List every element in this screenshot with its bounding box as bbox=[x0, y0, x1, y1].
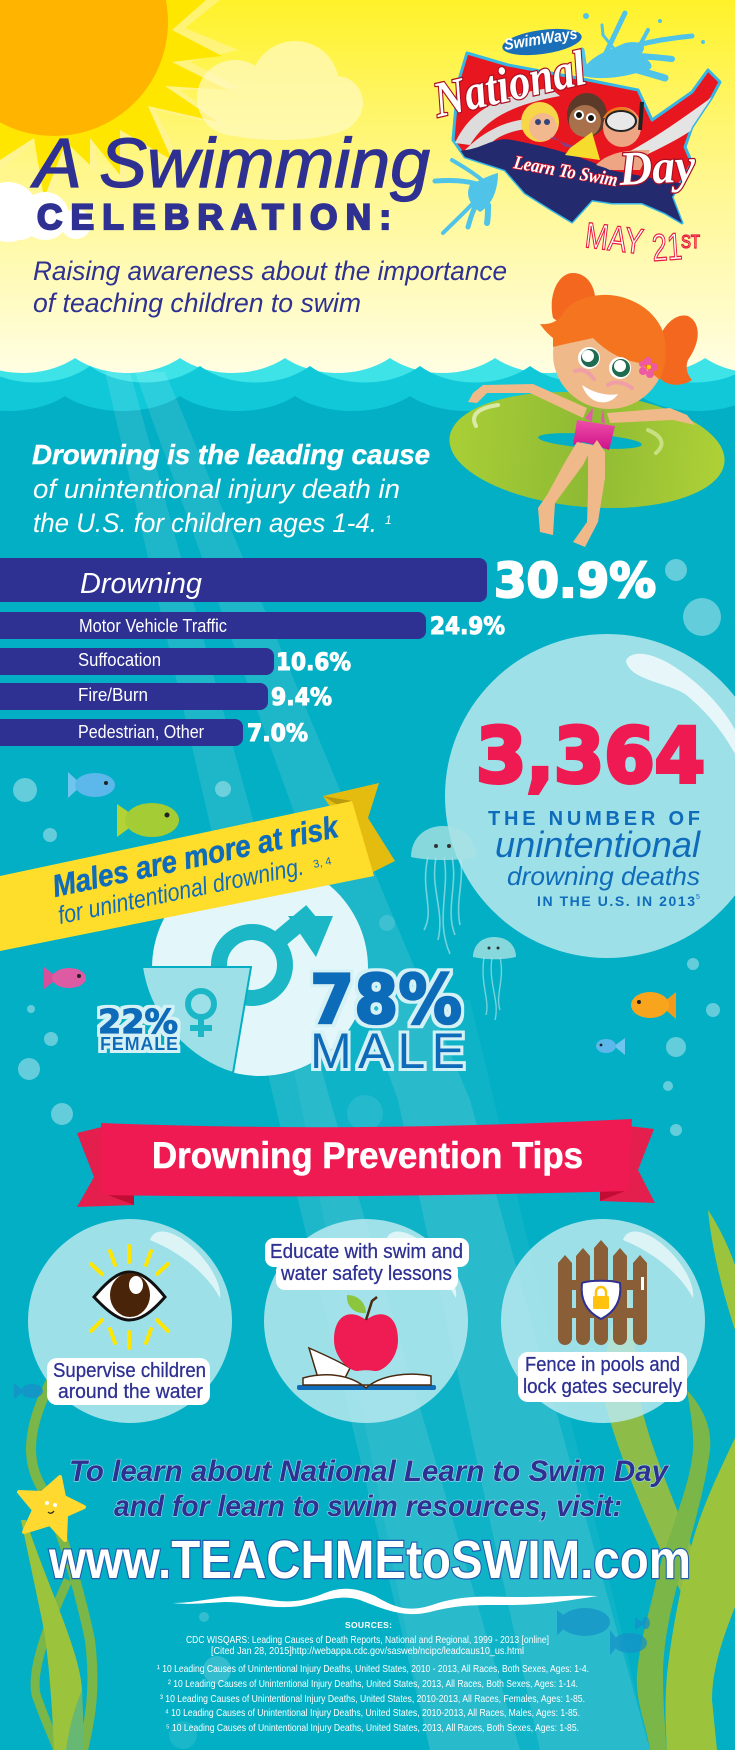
label: Educate with swim and bbox=[270, 1241, 463, 1263]
lead statement: the U.S. for children ages 1-4. bbox=[33, 508, 377, 538]
female slice bbox=[142, 967, 251, 1073]
swimsuit bbox=[573, 408, 615, 450]
label bbox=[47, 1358, 210, 1405]
lead statement: of unintentional injury death in bbox=[33, 474, 400, 504]
bar: Pedestrian, Other: Pedestrian, Other bbox=[78, 722, 204, 742]
subtitle: Raising awareness about the importance bbox=[33, 256, 507, 286]
bubble highlight bbox=[386, 1232, 456, 1298]
sources: [Cited Jan 28, 2015]http://webappa.cdc.gov/sasweb/ncipc/leadcaus10_us.html bbox=[211, 1645, 524, 1657]
jellyfish: small bbox=[473, 937, 516, 1020]
seaweed: right bbox=[602, 1210, 735, 1750]
hair bbox=[540, 295, 666, 380]
fish: orange bbox=[631, 992, 676, 1019]
bar: Fire/Burn: Fire/Burn bbox=[78, 685, 148, 705]
male percentage bbox=[310, 961, 465, 1079]
tip bubble: educate bbox=[264, 1219, 469, 1423]
seaweed: left bbox=[21, 1377, 92, 1750]
female percentage: 22% bbox=[98, 1002, 178, 1041]
bar: Suffocation bbox=[0, 648, 351, 676]
sources: SOURCES: bbox=[345, 1620, 392, 1630]
bubble highlight bbox=[626, 654, 735, 754]
male pie bbox=[152, 860, 368, 1076]
bar: Suffocation: 10.6% bbox=[276, 648, 351, 676]
stat bubble: 3,364 bbox=[445, 634, 735, 958]
fish: pink bbox=[44, 967, 86, 989]
male percentage: 78% bbox=[310, 961, 462, 1040]
bar: Motor Vehicle Traffic bbox=[0, 612, 505, 640]
label bbox=[265, 1238, 469, 1290]
caption: IN THE U.S. IN 2013 bbox=[537, 893, 695, 909]
swim ring bbox=[445, 381, 729, 519]
bar: Motor Vehicle Traffic: 24.9% bbox=[430, 612, 505, 640]
eyes bbox=[578, 347, 631, 379]
smile bbox=[582, 385, 618, 402]
lead statement: Drowning is the leading cause bbox=[32, 439, 430, 470]
flower bbox=[639, 357, 658, 378]
banner: drowning prevention tips bbox=[77, 1119, 655, 1207]
logo words: Learn To Swim: Learn To Swim bbox=[511, 152, 619, 191]
sources bbox=[157, 1620, 589, 1734]
call to action: and for learn to swim resources, visit: bbox=[114, 1490, 622, 1523]
subtitle bbox=[33, 256, 507, 318]
map of the U.S. bbox=[440, 53, 720, 235]
bar: Drowning: 30.9% bbox=[494, 554, 656, 609]
sources: ¹ 10 Leading Causes of Unintentional Injury Deaths, United States, 2010 - 2013, All Races, Both Sexes, Ages: 1-4. bbox=[157, 1663, 589, 1675]
splash: top right bbox=[582, 13, 705, 78]
date: May 21st: ST bbox=[681, 232, 700, 252]
label: Supervise children bbox=[53, 1360, 206, 1382]
cloud: white bbox=[0, 182, 91, 242]
call to action bbox=[69, 1455, 669, 1523]
caption: THE NUMBER OF bbox=[488, 808, 700, 830]
bubble highlight bbox=[150, 1232, 220, 1298]
title: CELEBRATION: bbox=[37, 198, 397, 237]
jellyfish: large bbox=[411, 826, 476, 954]
fish: blue bbox=[68, 772, 115, 798]
sources: CDC WISQARS: Leading Causes of Death Reports, National and Regional, 1999 - 2013 [online] bbox=[186, 1634, 549, 1646]
bar: Motor Vehicle Traffic: Motor Vehicle Traffic bbox=[79, 616, 227, 636]
fish: small blue bbox=[596, 1038, 625, 1055]
bar: Pedestrian, Other: 7.0% bbox=[247, 719, 308, 747]
water: deep bbox=[0, 396, 735, 1750]
icon: book and apple bbox=[297, 1295, 436, 1390]
caption bbox=[488, 808, 701, 909]
sources: ⁵ 10 Leading Causes of Unintentional Injury Deaths, United States, 2013, All Races, Both Sexes, Ages: 1-85. bbox=[166, 1722, 579, 1734]
gender split chart bbox=[98, 860, 465, 1079]
water wave: light bbox=[0, 358, 735, 500]
date: May 21st: 21 bbox=[651, 226, 684, 270]
splash: bottom left bbox=[435, 160, 498, 233]
ribbon: males at risk: for unintentional drowning. bbox=[56, 853, 306, 930]
water wave: middle bbox=[0, 366, 735, 500]
male symbol bbox=[219, 912, 333, 998]
bar: Drowning: Drowning bbox=[80, 568, 202, 600]
bar: Pedestrian, Other bbox=[0, 719, 308, 747]
title bbox=[30, 124, 430, 237]
logo word: Day: Day bbox=[617, 139, 697, 196]
title: A Swimming bbox=[30, 124, 430, 202]
small bubbles bbox=[13, 559, 721, 1749]
bar: Suffocation: Suffocation bbox=[78, 650, 161, 670]
ribbon: males at risk: 3, 4 bbox=[312, 855, 333, 871]
sources: ⁴ 10 Leading Causes of Unintentional Injury Deaths, United States, 2010-2013, All Races, Males, Ages: 1-85. bbox=[165, 1707, 580, 1719]
lead statement bbox=[32, 439, 430, 538]
blush bbox=[575, 370, 632, 388]
starfish bbox=[19, 1477, 84, 1540]
wave underline bbox=[173, 1589, 598, 1614]
background fish: lower right bbox=[557, 1608, 650, 1655]
label: lock gates securely bbox=[523, 1376, 682, 1398]
date: May 21st: MAY bbox=[583, 214, 646, 262]
caption: unintentional bbox=[495, 824, 701, 865]
label: around the water bbox=[58, 1381, 203, 1403]
big number: 3,364 bbox=[476, 711, 705, 800]
sun bbox=[0, 0, 240, 208]
legs bbox=[538, 440, 605, 547]
label: water safety lessons bbox=[280, 1263, 452, 1285]
banner: drowning prevention tips: Drowning Prevention Tips bbox=[152, 1135, 583, 1176]
SwimWays badge: SwimWays bbox=[503, 26, 579, 54]
light beams bbox=[105, 372, 650, 1750]
sources: ² 10 Leading Causes of Unintentional Injury Deaths, United States, 2013, All Races, Both Sexes, Ages: 1-14. bbox=[168, 1678, 578, 1690]
caption: drowning deaths bbox=[507, 861, 700, 891]
logo word: National: National bbox=[427, 39, 591, 128]
label bbox=[518, 1352, 687, 1402]
bar: Drowning bbox=[0, 554, 656, 609]
ponytails bbox=[552, 273, 698, 385]
lead statement: 1 bbox=[385, 513, 392, 527]
ribbon: males at risk bbox=[0, 783, 395, 951]
bar: Fire/Burn bbox=[0, 683, 332, 711]
tip bubble: fence bbox=[501, 1219, 705, 1423]
label: Fence in pools and bbox=[525, 1354, 680, 1376]
sources: ³ 10 Leading Causes of Unintentional Injury Deaths, United States, 2010-2013, All Races, Females, Ages: 1-85. bbox=[160, 1693, 585, 1705]
icon: eye bbox=[91, 1246, 168, 1348]
female percentage: FEMALE bbox=[100, 1034, 178, 1054]
call to action: To learn about National Learn to Swim Day bbox=[69, 1455, 669, 1488]
kids bbox=[521, 93, 650, 170]
arms bbox=[468, 384, 695, 425]
head bbox=[553, 299, 665, 409]
cloud: pale bbox=[197, 41, 363, 140]
bubble highlight bbox=[623, 1232, 693, 1298]
fish: green bbox=[117, 803, 179, 837]
caption: 5 bbox=[696, 894, 700, 901]
female symbol bbox=[188, 991, 214, 1037]
icon: fence with lock bbox=[558, 1240, 647, 1345]
logo: National Learn To Swim Day bbox=[427, 13, 720, 235]
tip bubble: supervise bbox=[28, 1219, 232, 1423]
male percentage: MALE bbox=[310, 1023, 465, 1079]
sky background bbox=[0, 0, 735, 380]
girl in swim ring bbox=[445, 273, 729, 547]
date: May 21st bbox=[583, 214, 700, 270]
faint seaweed fish bbox=[14, 1383, 43, 1399]
ribbon: males at risk: Males are more at risk bbox=[49, 809, 343, 904]
bar chart: leading causes bbox=[0, 554, 656, 747]
subtitle: of teaching children to swim bbox=[33, 288, 361, 318]
bar: Fire/Burn: 9.4% bbox=[271, 683, 332, 711]
